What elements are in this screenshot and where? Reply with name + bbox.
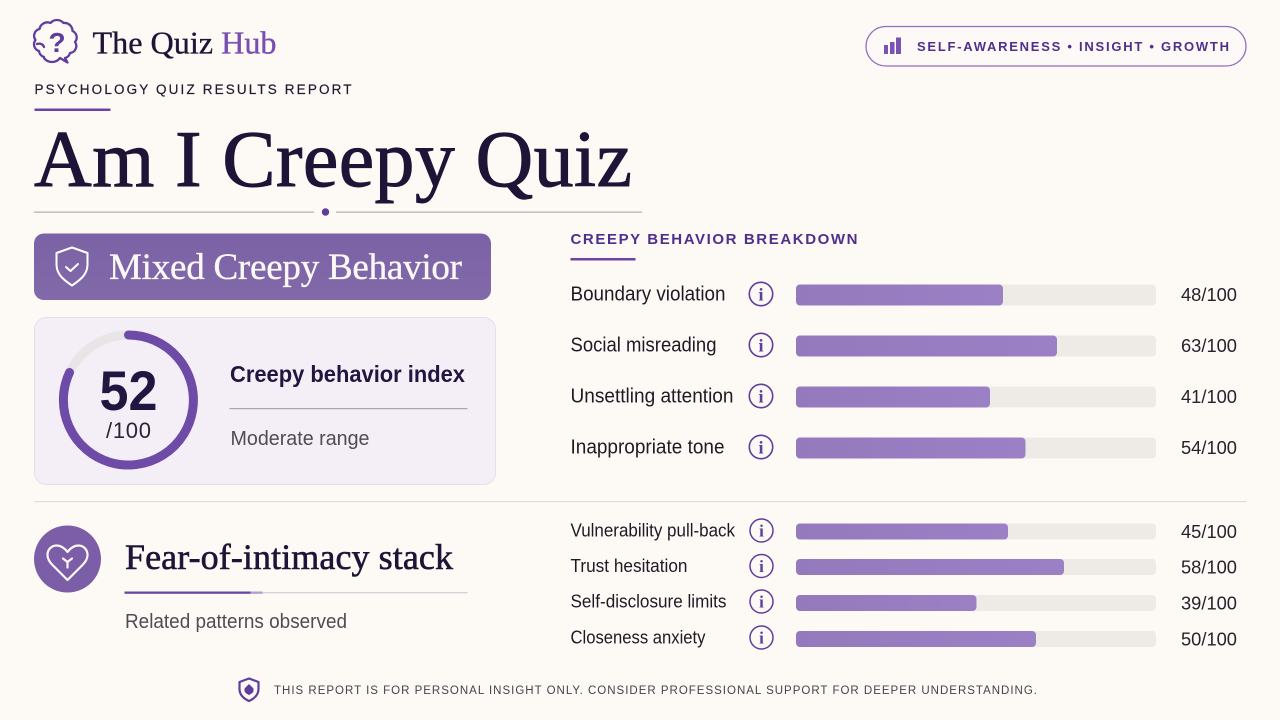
row: Boundary violation: 48/100 [1181,285,1237,305]
row: Unsettling attention: Unsettling attention [570,386,734,408]
row: Trust hesitation: 58/100 [1181,558,1237,578]
logo: The Quiz Hub [34,20,277,62]
section heading: Fear-of-intimacy stack [125,537,453,577]
row: Closeness anxiety: Closeness anxiety [570,626,706,648]
icon: bar chart [884,38,901,54]
disclaimer text: THIS REPORT IS FOR PERSONAL INSIGHT ONLY. CONSIDER PROFESSIONAL SUPPORT FOR DEEPER UNDERSTANDING. [274,685,1037,697]
eyebrow: report type: PSYCHOLOGY QUIZ RESULTS REPORT [34,82,352,97]
section: fear-of-intimacy stack [34,526,468,633]
row: Social misreading: i [758,336,764,356]
row: Unsettling attention: i [758,386,764,406]
row: Inappropriate tone: 54/100 [1181,438,1237,458]
row: Inappropriate tone: Inappropriate tone [570,436,724,458]
row: Vulnerability pull-back: Vulnerability pull-back [570,520,736,540]
icon: heart badge [34,526,101,592]
row: Self-disclosure limits: 39/100 [1181,594,1237,614]
row: Closeness anxiety: 50/100 [1181,630,1237,650]
section note: Related patterns observed [125,611,347,633]
row: Trust hesitation [570,554,1237,578]
question mark: ? [48,27,66,58]
card heading: Creepy behavior index [230,361,465,387]
tagline text: SELF-AWARENESS • INSIGHT • GROWTH [917,39,1229,54]
wordmark: The Quiz Hub [92,24,276,60]
score value: 52 [100,359,158,422]
row: Vulnerability pull-back: i [759,522,764,540]
title divider [34,208,642,216]
row: Boundary violation: i [758,284,764,304]
row: Boundary violation [570,282,1237,306]
result banner [34,234,491,300]
breakdown heading: CREEPY BEHAVIOR BREAKDOWN [570,231,858,248]
row: Trust hesitation: Trust hesitation [570,555,688,576]
row: Vulnerability pull-back [570,519,1237,542]
score card [34,318,496,484]
icon: shield [240,678,258,701]
title: Am I Creepy Quiz [34,116,632,204]
icon: shield check [56,248,88,286]
row: Social misreading [570,333,1237,357]
row: Unsettling attention: 41/100 [1181,387,1237,407]
banner text: Mixed Creepy Behavior [109,247,462,288]
row: Unsettling attention [570,384,1237,408]
row: Self-disclosure limits [570,590,1237,614]
icon: brain with question mark [34,20,77,62]
row: Vulnerability pull-back: 45/100 [1181,522,1237,542]
footer disclaimer [240,678,1037,701]
row: Inappropriate tone [570,435,1237,459]
row: Closeness anxiety [570,626,1237,650]
tagline pill [866,26,1246,66]
card note: Moderate range [230,428,370,450]
score scale: /100 [106,418,151,443]
row: Boundary violation: Boundary violation [570,284,726,306]
donut gauge [63,335,194,465]
row: Closeness anxiety: i [759,628,764,648]
row: Inappropriate tone: i [758,438,764,458]
row: Social misreading: Social misreading [570,334,716,356]
row: Trust hesitation: i [759,557,764,576]
row: Self-disclosure limits: i [759,592,764,612]
row: Social misreading: 63/100 [1181,336,1237,356]
row: Self-disclosure limits: Self-disclosure limits [570,590,726,612]
